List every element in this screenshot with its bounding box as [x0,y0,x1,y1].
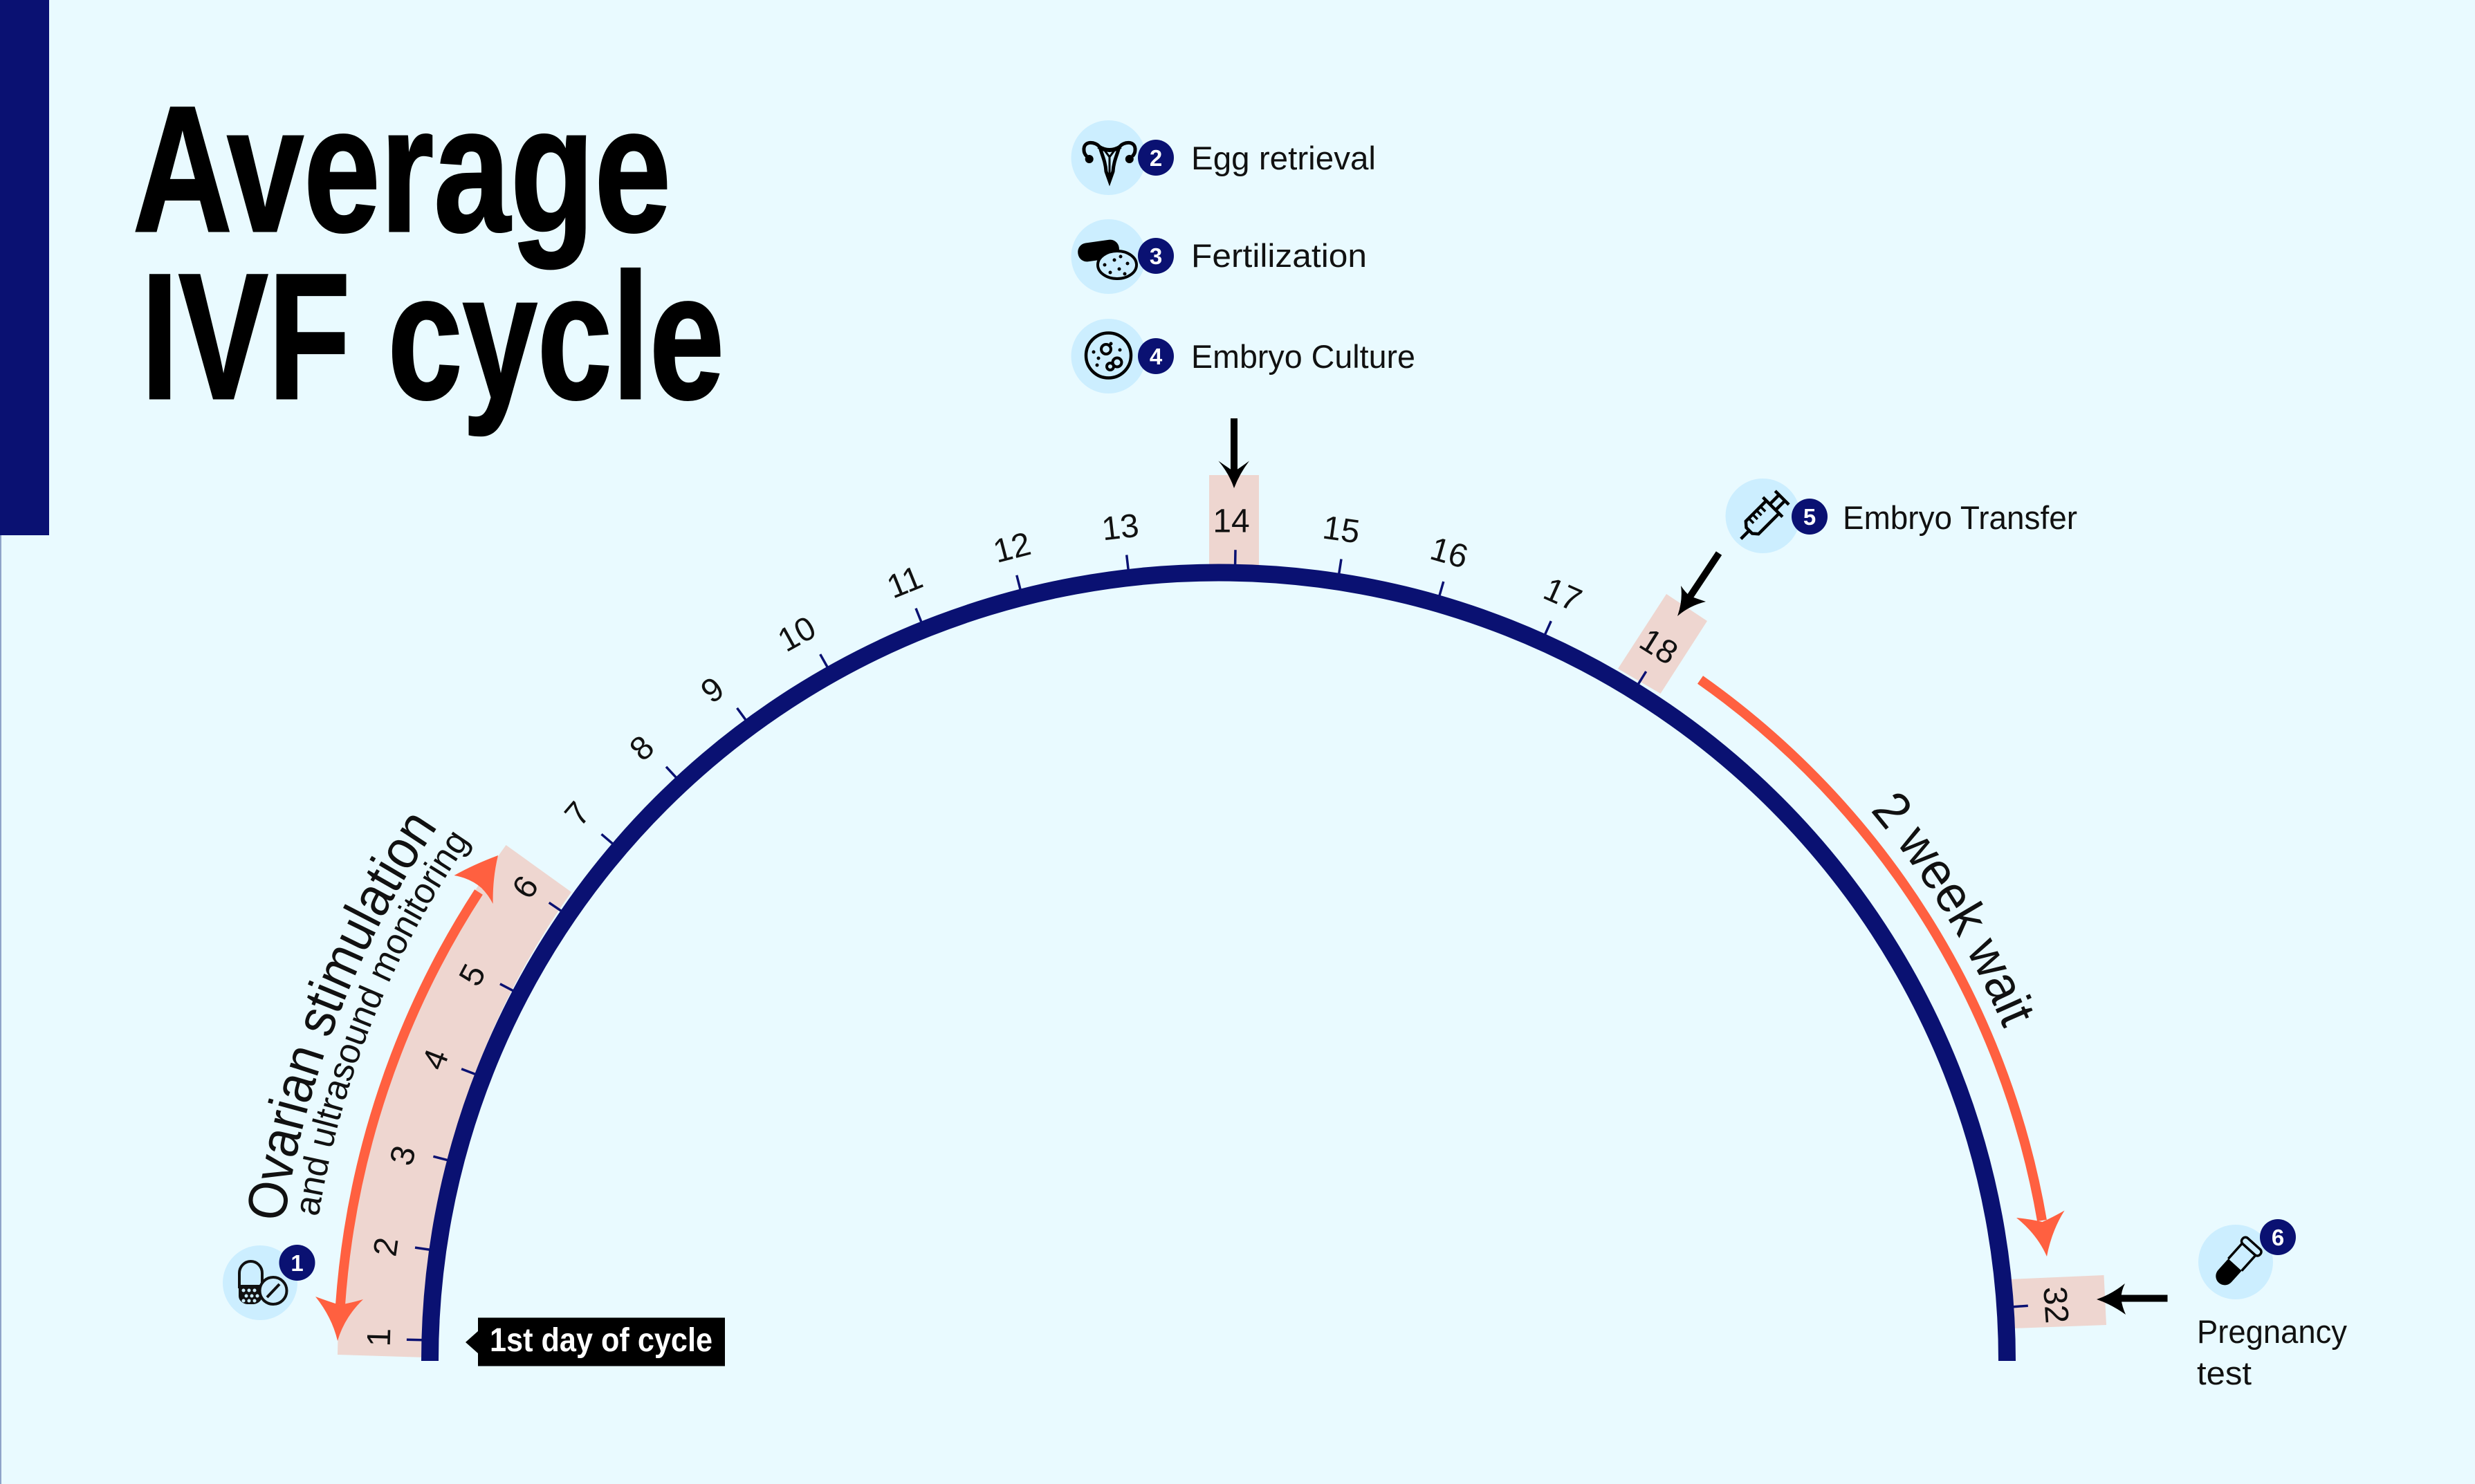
step 3: fertilization: Fertilization [1191,237,1367,274]
callout: first day of cycle: 1st day of cycle [490,1322,712,1359]
step 3: fertilization: 3 [1150,243,1162,269]
title: IVF cycle [141,236,724,438]
day numbers: 13 [1100,508,1141,548]
step 6: pregnancy test: 6 [2272,1225,2284,1250]
day numbers: 1 [361,1328,398,1347]
day numbers: 15 [1321,510,1362,550]
step 4: embryo culture: Embryo Culture [1191,338,1415,375]
step 1: stimulation icon [223,1245,315,1320]
day numbers: 2 [367,1235,406,1259]
arrow: two week wait span [1700,680,2065,1256]
day tick marks [407,550,2028,1340]
label: ovarian stimulation: Ovarian stimulation [248,816,436,1218]
step 2: egg retrieval [1071,120,1376,195]
step 3: fertilization [1071,219,1367,294]
day numbers: 12 [990,526,1035,571]
day numbers: 4 [415,1044,456,1075]
day numbers: 32 [2036,1286,2075,1325]
arrow: day 32 [2097,1283,2168,1315]
day numbers: 6 [506,869,546,905]
step 5: embryo transfer [1725,479,2077,553]
highlight: days 1 to 6 [338,845,571,1357]
step 6: pregnancy test: test [2197,1355,2252,1391]
day numbers: 5 [452,958,493,992]
step 2: egg retrieval: 2 [1150,145,1162,171]
day numbers: 7 [558,795,598,833]
day numbers: 16 [1426,530,1472,576]
callout: first day of cycle [466,1318,725,1366]
title: Average [133,69,671,270]
title [133,69,724,438]
arrow: ovarian stimulation span [315,855,498,1341]
arrow: day 14 [1218,418,1249,488]
day numbers: 10 [772,609,822,660]
day numbers [361,503,2075,1347]
day numbers: 18 [1633,622,1684,672]
day numbers: 3 [383,1142,423,1169]
highlight: day 14 [1209,475,1259,568]
step 2: egg retrieval: Egg retrieval [1191,140,1376,176]
day numbers: 11 [882,559,928,606]
label: ultrasound monitoring: and ultrasound monitoring [300,831,472,1215]
step 1: stimulation icon: 1 [291,1250,304,1276]
arrow: day 18 [1677,553,1719,616]
step 6: pregnancy test [2197,1219,2347,1391]
step 5: embryo transfer: 5 [1803,504,1816,530]
highlight: day 18 [1618,594,1707,694]
day numbers: 8 [623,729,661,768]
highlight: day 32 [2009,1275,2106,1328]
day numbers: 17 [1538,571,1587,620]
step 4: embryo culture: 4 [1150,344,1163,369]
step 5: embryo transfer: Embryo Transfer [1843,499,2077,536]
step 6: pregnancy test: Pregnancy [2197,1313,2347,1350]
label: 2 week wait: 2 week wait [1872,794,2032,1029]
day numbers: 14 [1213,503,1250,539]
timeline arc [430,573,2007,1361]
step 4: embryo culture [1071,319,1415,393]
accent bar [0,0,49,535]
day numbers: 9 [694,670,731,711]
